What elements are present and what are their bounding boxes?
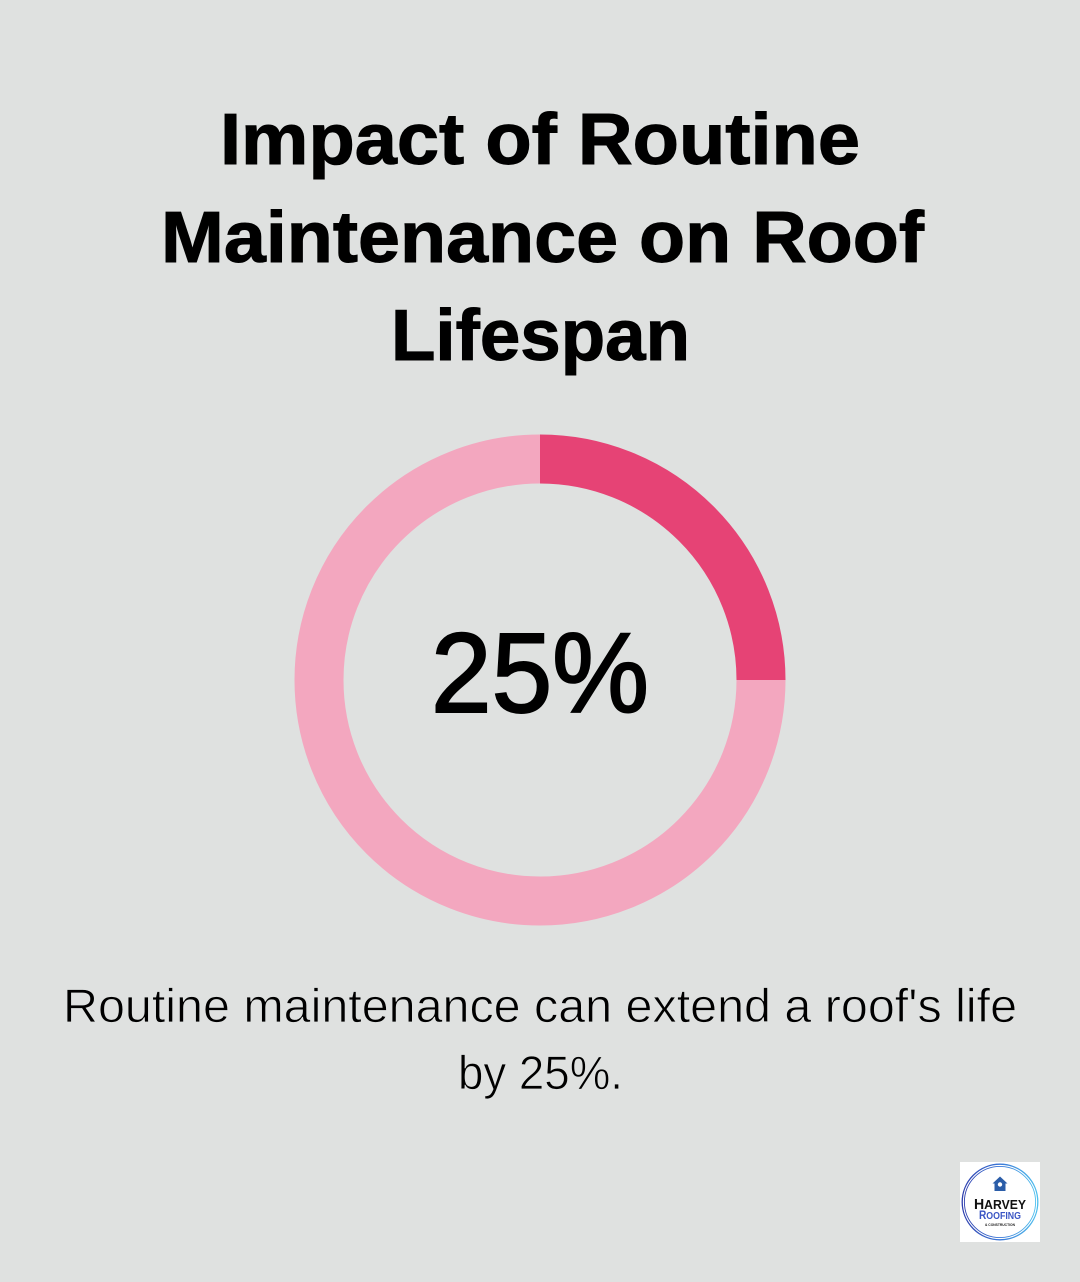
donut centre value: 25% <box>431 610 649 736</box>
title <box>161 100 925 376</box>
description text: by 25%. <box>458 1046 623 1099</box>
title: Lifespan <box>391 296 690 376</box>
title: Impact of Routine <box>220 100 860 180</box>
logo ring <box>962 1164 1038 1240</box>
donut remainder: 75% <box>319 459 761 901</box>
donut chart: 25% <box>319 459 761 901</box>
logo: Harvey Roofing & Construction: ROOFING <box>979 1210 1021 1222</box>
title: Maintenance on Roof <box>161 198 925 278</box>
logo: Harvey Roofing & Construction <box>960 1162 1040 1242</box>
logo house icon <box>992 1176 1008 1191</box>
logo: Harvey Roofing & Construction: & CONSTRUCTION <box>985 1222 1015 1227</box>
description text <box>63 979 1017 1099</box>
donut highlighted segment: 25% <box>540 459 761 680</box>
description text: Routine maintenance can extend a roof's life <box>63 979 1017 1032</box>
logo wordmark: HARVEY <box>974 1196 1026 1213</box>
